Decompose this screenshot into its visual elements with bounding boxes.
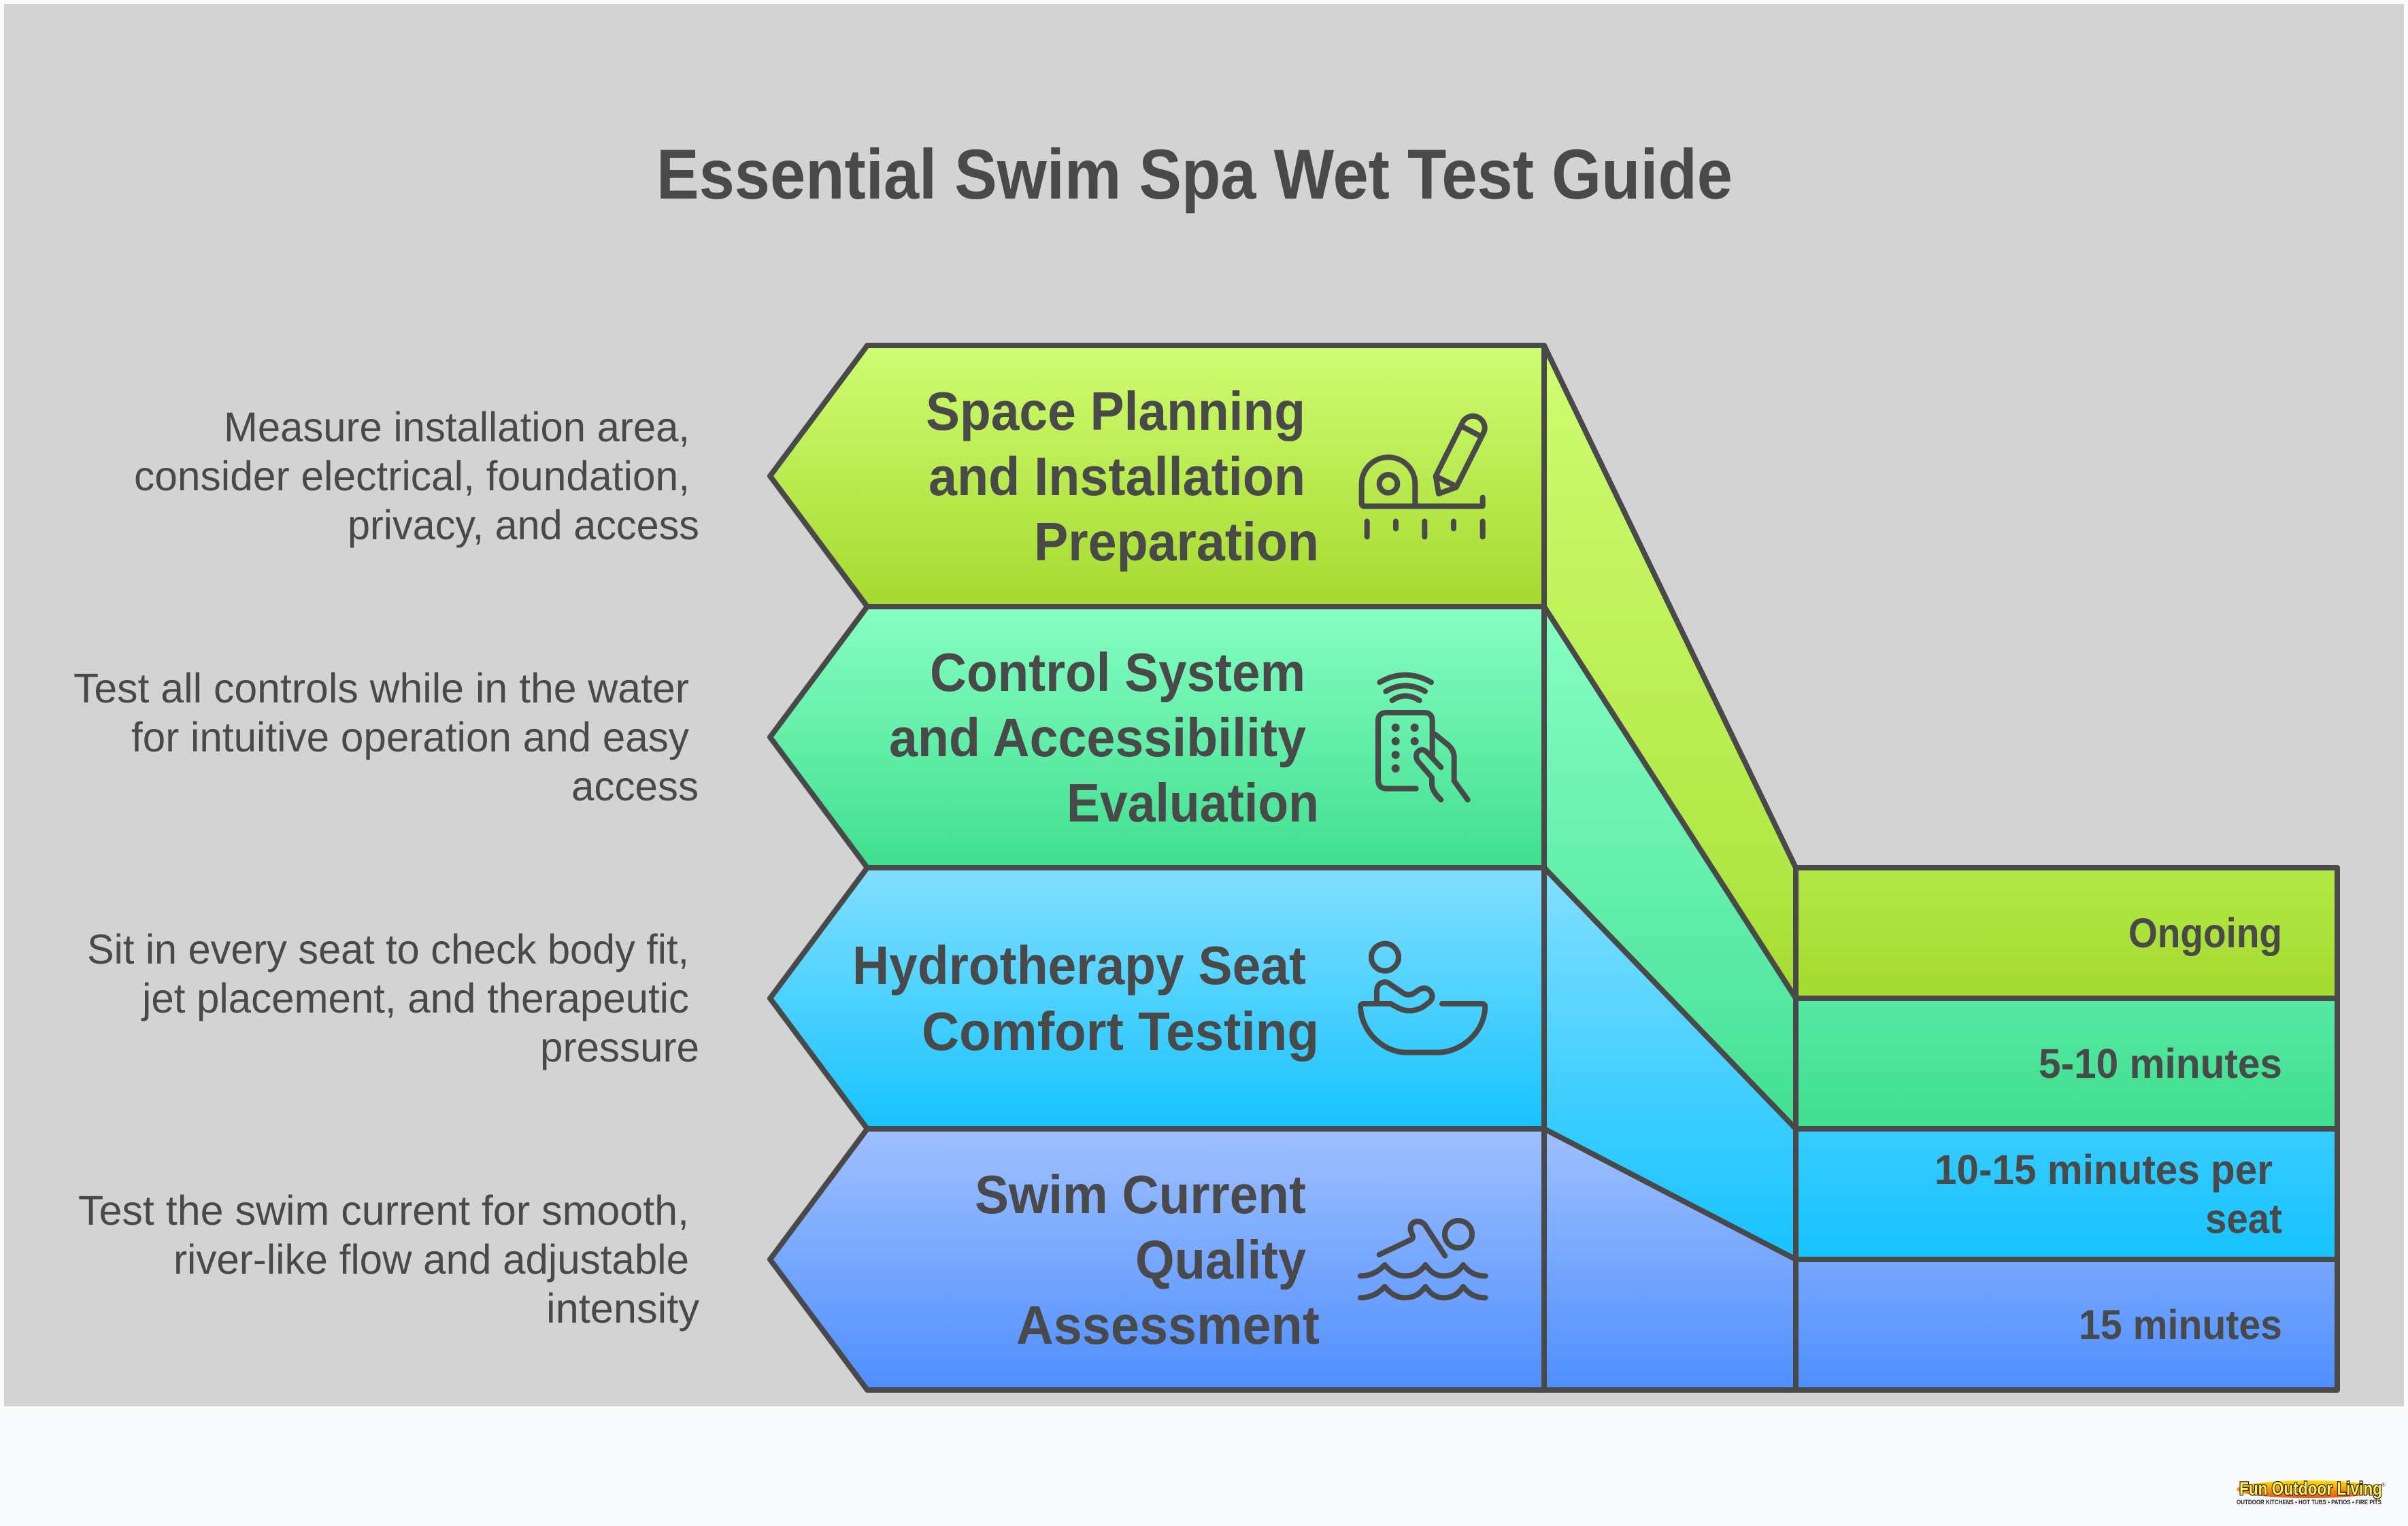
description: swim current: Test the swim current for smooth, [78, 1187, 689, 1234]
description: swim current: river-like flow and adjustable [173, 1236, 689, 1283]
heading: control system: and Accessibility [889, 707, 1306, 768]
heading: space planning: and Installation [929, 446, 1305, 507]
icon: remote control in hand [1378, 675, 1468, 800]
title: Essential Swim Spa Wet Test Guide [656, 135, 1733, 214]
heading: space planning [926, 381, 1319, 572]
time box: 5-10 minutes [1796, 998, 2337, 1129]
logo: Fun Outdoor Living: OUTDOOR KITCHENS • HOT TUBS • PATIOS • FIRE PITS [2237, 1499, 2381, 1506]
heading: control system [889, 642, 1319, 833]
description: hydrotherapy seat: pressure [540, 1024, 699, 1070]
heading: swim current: Quality [1135, 1230, 1306, 1290]
time box: 5-10 minutes: 5-10 minutes [2039, 1040, 2282, 1087]
heading: space planning: Preparation [1034, 511, 1319, 572]
step 1: space planning arrow [770, 345, 1544, 607]
description: space planning: privacy, and access [348, 502, 699, 548]
icon: tape measure and pencil [1362, 416, 1485, 537]
description: control system: Test all controls while in the water [73, 665, 689, 711]
step 4: swim current arrow [770, 1129, 1544, 1390]
description: swim current [78, 1187, 699, 1332]
description: hydrotherapy seat: jet placement, and therapeutic [141, 975, 689, 1021]
heading: hydrotherapy seat: Hydrotherapy Seat [852, 935, 1306, 996]
step 2: control system arrow [770, 607, 1544, 868]
description: space planning: Measure installation area, [224, 404, 690, 450]
connector band: hydrotherapy seat [1544, 868, 1796, 1259]
description: hydrotherapy seat: Sit in every seat to check body fit, [87, 926, 689, 972]
description: control system [73, 665, 699, 809]
time box: 10-15 minutes per seat [1796, 1129, 2337, 1259]
time box: 10-15 minutes per seat: 10-15 minutes per [1935, 1147, 2273, 1193]
time box: ongoing [1796, 868, 2337, 998]
heading: swim current: Assessment [1016, 1295, 1320, 1355]
step 3: hydrotherapy seat arrow [770, 868, 1544, 1129]
heading: hydrotherapy seat: Comfort Testing [922, 1001, 1319, 1062]
heading: control system: Evaluation [1067, 773, 1319, 833]
description: space planning [134, 404, 699, 548]
time box: 15 minutes [1796, 1259, 2337, 1390]
description: control system: access [571, 763, 699, 809]
description: control system: for intuitive operation and easy [131, 714, 689, 760]
description: swim current: intensity [546, 1285, 699, 1332]
connector band: space planning [1544, 345, 1796, 998]
heading: hydrotherapy seat [852, 935, 1319, 1062]
icon: swimmer in waves [1360, 1221, 1486, 1298]
time box: 10-15 minutes per seat: seat [2205, 1196, 2282, 1242]
heading: control system: Control System [930, 642, 1305, 702]
connector band: swim current [1544, 1129, 1796, 1390]
description: hydrotherapy seat [87, 926, 699, 1070]
time box: 15 minutes: 15 minutes [2079, 1302, 2282, 1348]
logo: Fun Outdoor Living [2237, 1478, 2386, 1506]
connector band: control system [1544, 607, 1796, 1129]
time box: ongoing: Ongoing [2128, 910, 2282, 956]
logo: Fun Outdoor Living: Fun Outdoor Living [2239, 1478, 2382, 1499]
icon: person in tub [1360, 944, 1485, 1053]
logo: Fun Outdoor Living: ® [2381, 1482, 2386, 1488]
description: space planning: consider electrical, foundation, [134, 453, 690, 499]
heading: swim current: Swim Current [975, 1164, 1306, 1225]
heading: space planning: Space Planning [926, 381, 1305, 441]
heading: swim current [975, 1164, 1320, 1355]
